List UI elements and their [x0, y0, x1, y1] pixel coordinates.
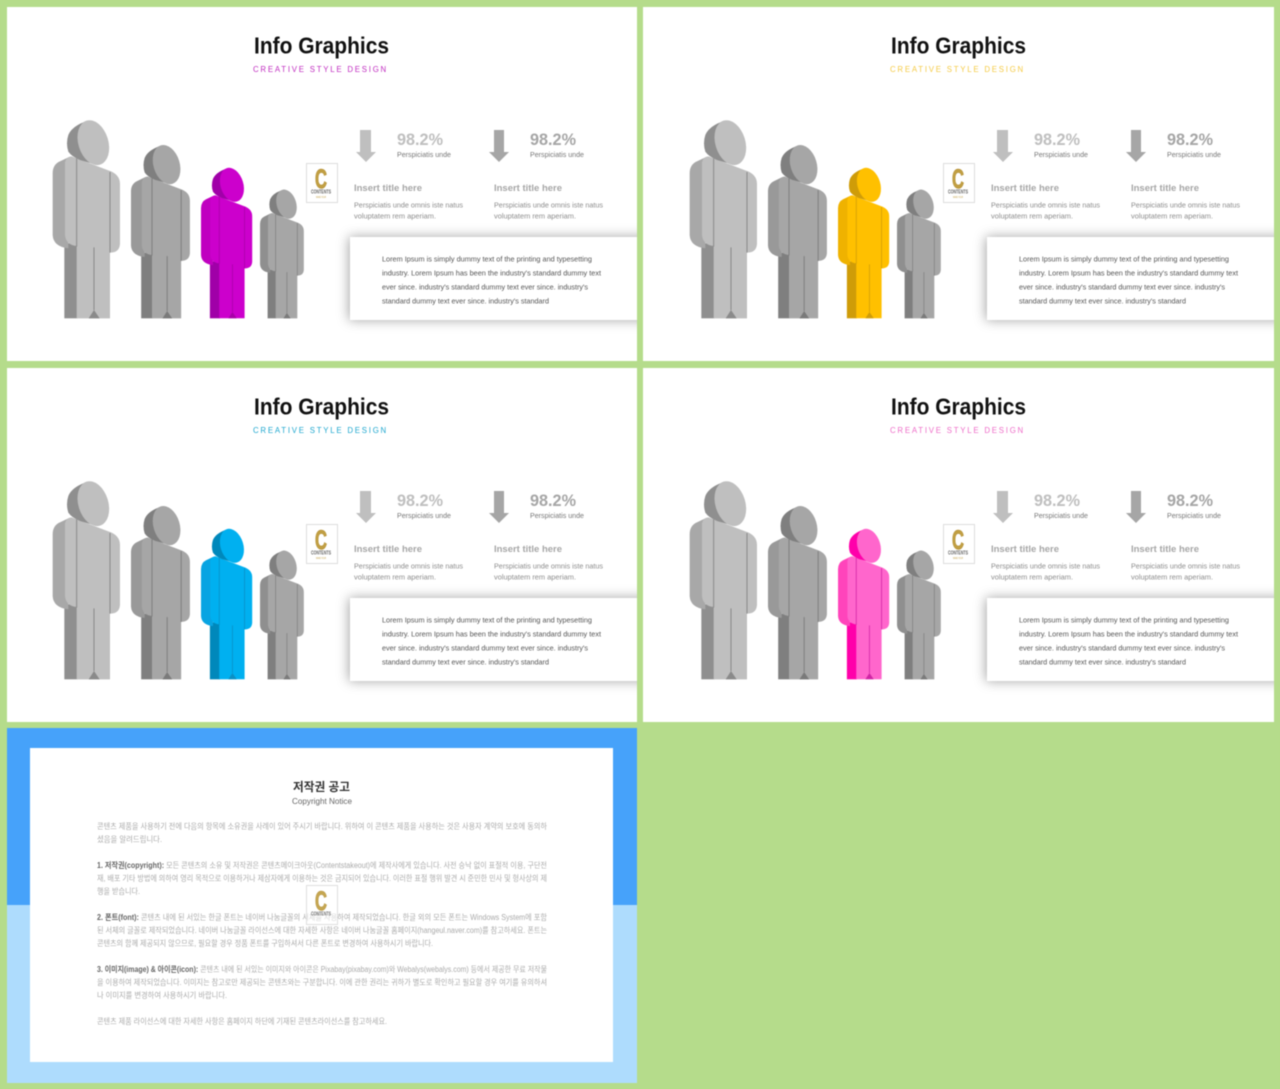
logo: [306, 164, 338, 202]
stat 2 value: 98.2%: [530, 130, 576, 149]
intro paragraph: [97, 821, 548, 844]
logo watermark: CONTENTS: [311, 912, 331, 918]
subtitle: CREATIVE STYLE DESIGN: [253, 426, 388, 435]
column 1 text: Perspiciatis unde omnis iste natus: [991, 200, 1100, 210]
column 2 text: Perspiciatis unde omnis iste natus: [494, 200, 603, 210]
section 3 image and icon: 3. 이미지(image) & 아이콘(icon): 콘텐츠 내에 된 서있는 이미지와 아이콘은 Pixabay(pixabay.com)와 Webalys(webalys.com) 등에서 제공한 무료 저작물: [97, 964, 547, 974]
column 2 text: Insert title here: [494, 544, 562, 555]
text box: [987, 237, 1280, 320]
text box: Lorem Ipsum is simply dummy text of the printing and typesetting: [1019, 254, 1229, 264]
stat 1 label: Perspiciatis unde: [397, 150, 451, 159]
logo watermark: [306, 886, 338, 924]
column 2 text: [1131, 183, 1240, 220]
section 2 font: 2. 폰트(font): 콘텐츠 내에 된 서있는 한글 폰트는 네이버 나눔글꼴의 서체를 사용하여 제작되었습니다. 한글 외의 모든 폰트는 Windows System에 포함: [97, 912, 548, 922]
column 2 text: [494, 183, 603, 220]
section 2 font: 된 서체의 글꼴로 제작되었습니다. 네이버 나눔글꼴 라이선스에 대한 자세한 사항은 네이버 나눔글꼴 홈페이지(hangeul.naver.com)를 참고하세요. 폰트는: [97, 925, 547, 935]
stat 1 value: 98.2%: [1034, 491, 1080, 510]
column 2 text: voluptatem rem aperiam.: [494, 572, 576, 582]
stat 2 label: Perspiciatis unde: [530, 150, 584, 159]
column 1 text: Perspiciatis unde omnis iste natus: [991, 562, 1100, 570]
stat 1 label: Perspiciatis unde: [397, 511, 451, 520]
logo: C: [952, 164, 964, 194]
arrow 1: [356, 491, 376, 523]
person 1: [53, 477, 120, 679]
text box: [350, 237, 650, 320]
arrow 2: [1126, 491, 1146, 523]
person 3 highlighted: [201, 165, 252, 318]
person 3 highlighted: [838, 165, 889, 318]
title: Info Graphics: [891, 394, 1026, 420]
section 1 copyright: 행을 받습니다.: [97, 886, 140, 896]
logo: CONTENTS: [311, 550, 331, 556]
stat 2 value: 98.2%: [530, 491, 576, 510]
people chart: [53, 477, 304, 679]
logo: MAKE YOUR: [953, 556, 963, 560]
section 3 image and icon: 을 이용하여 제작되었습니다. 이미지는 참고로만 제공되는 콘텐츠와는 구분합니다. 이에 관한 권리는 귀하가 별도로 확인하고 필요할 경우 여기를 유의하셔: [97, 977, 547, 987]
text box: industry. Lorem Ipsum has been the industry's standard dummy text: [1019, 630, 1239, 638]
column 1 text: Insert title here: [354, 183, 422, 194]
column 2 text: voluptatem rem aperiam.: [1131, 572, 1213, 582]
column 1 text: Perspiciatis unde omnis iste natus: [354, 200, 463, 210]
person 1: [690, 116, 757, 318]
text box: Lorem Ipsum is simply dummy text of the printing and typesetting: [382, 616, 592, 624]
column 1 text: voluptatem rem aperiam.: [354, 212, 436, 220]
column 2 text: Perspiciatis unde omnis iste natus: [1131, 200, 1240, 210]
person 2: [131, 503, 190, 679]
title: Info Graphics: [254, 32, 389, 58]
text box: industry. Lorem Ipsum has been the industry's standard dummy text: [382, 268, 602, 278]
panel: magenta slide: [7, 7, 650, 361]
stat 2 label: Perspiciatis unde: [1167, 150, 1221, 159]
column 2 text: [1131, 544, 1240, 582]
section 1 copyright: 1. 저작권(copyright): 모든 콘텐츠의 소유 및 저작권은 콘텐츠메이크아웃(Contentstakeout)에 제작사에게 있습니다. 사전 승낙 없이 표절적 이용, 구단전: [97, 860, 547, 870]
column 1 text: [354, 544, 463, 582]
stat 2 value: 98.2%: [1167, 130, 1213, 149]
logo: CONTENTS: [311, 190, 331, 196]
column 1 text: voluptatem rem aperiam.: [991, 572, 1073, 582]
text box: ever since. industry's standard dummy text ever since. industry's: [382, 644, 588, 652]
person 2: [768, 503, 827, 679]
section 1 copyright: 재, 배포 기타 방법에 의하여 영리 목적으로 이용하거나 제삼자에게 이용하는 것은 금지되어 있습니다. 이러한 표절 행위 발견 시 준민한 민사 및 형사상의 제: [97, 873, 547, 883]
column 1 text: Insert title here: [354, 544, 422, 555]
text box: industry. Lorem Ipsum has been the industry's standard dummy text: [1019, 268, 1239, 278]
text box: standard dummy text ever since. industry's standard: [382, 658, 549, 666]
title: Info Graphics: [254, 394, 389, 420]
text box: industry. Lorem Ipsum has been the industry's standard dummy text: [382, 630, 602, 638]
logo: [306, 524, 338, 564]
logo: [944, 524, 974, 564]
logo: C: [315, 164, 327, 194]
subtitle: CREATIVE STYLE DESIGN: [253, 65, 388, 74]
person 1: [53, 116, 120, 318]
logo: MAKE YOUR: [953, 195, 963, 199]
text box: ever since. industry's standard dummy text ever since. industry's: [1019, 282, 1225, 292]
logo: MAKE YOUR: [316, 195, 326, 199]
arrow 2: [489, 491, 509, 523]
column 1 text: Perspiciatis unde omnis iste natus: [354, 562, 463, 570]
column 2 text: Insert title here: [1131, 183, 1199, 194]
logo: C: [315, 525, 327, 555]
panel: copyright notice: [7, 728, 637, 1083]
column 1 text: voluptatem rem aperiam.: [354, 572, 436, 582]
column 2 text: [494, 544, 603, 582]
stat 1 label: Perspiciatis unde: [1034, 150, 1088, 159]
text box: [987, 598, 1280, 681]
column 1 text: [354, 183, 463, 220]
text box: standard dummy text ever since. industry's standard: [382, 296, 549, 306]
stat 1 value: 98.2%: [1034, 130, 1080, 149]
text box: [350, 598, 650, 681]
column 2 text: Perspiciatis unde omnis iste natus: [1131, 562, 1240, 570]
person 4: [897, 187, 941, 318]
column 1 text: [991, 544, 1100, 582]
text box: ever since. industry's standard dummy text ever since. industry's: [1019, 644, 1225, 652]
section 2 font: [97, 912, 548, 948]
text box: Lorem Ipsum is simply dummy text of the printing and typesetting: [1019, 616, 1229, 624]
stat 2 label: Perspiciatis unde: [530, 511, 584, 520]
text box: standard dummy text ever since. industry's standard: [1019, 658, 1186, 666]
people chart: [53, 116, 304, 318]
stat 2 value: 98.2%: [1167, 491, 1213, 510]
section 1 copyright: [97, 860, 547, 896]
arrow 1: [356, 130, 376, 162]
subtitle: CREATIVE STYLE DESIGN: [890, 426, 1025, 435]
panel: pink slide: [643, 368, 1280, 722]
column 1 text: voluptatem rem aperiam.: [991, 212, 1073, 220]
arrow 2: [1126, 130, 1146, 162]
stat 1 value: 98.2%: [397, 491, 443, 510]
section 3 image and icon: 나 이미지를 변경하여 사용하시기 바랍니다.: [97, 990, 227, 1000]
title: Info Graphics: [891, 32, 1026, 58]
arrow 1: [993, 130, 1013, 162]
stat 1 label: Perspiciatis unde: [1034, 511, 1088, 520]
logo watermark: C: [315, 886, 327, 916]
intro paragraph: 콘텐츠 제품을 사용하기 전에 다음의 항목에 소유권을 사례이 있어 주시기 바랍니다. 위하여 이 콘텐츠 제품을 사용하는 것은 사용자 계약의 보호에 동의하: [97, 821, 548, 831]
person 2: [768, 142, 827, 318]
logo: [944, 164, 974, 202]
subtitle: CREATIVE STYLE DESIGN: [890, 65, 1025, 74]
arrow 1: [993, 491, 1013, 523]
column 2 text: Insert title here: [1131, 544, 1199, 555]
text box: Lorem Ipsum is simply dummy text of the printing and typesetting: [382, 254, 592, 264]
column 1 text: Insert title here: [991, 544, 1059, 555]
text box: ever since. industry's standard dummy text ever since. industry's: [382, 282, 588, 292]
column 2 text: Perspiciatis unde omnis iste natus: [494, 562, 603, 570]
logo: CONTENTS: [948, 190, 968, 196]
panel: yellow slide: [643, 7, 1280, 361]
person 4: [897, 548, 941, 679]
logo: C: [952, 525, 964, 555]
notice subheading: Copyright Notice: [292, 796, 352, 806]
logo: CONTENTS: [948, 550, 968, 556]
license note: 콘텐츠 제품 라이선스에 대한 자세한 사항은 홈페이지 하단에 기재된 콘텐츠라이선스를 참고하세요.: [97, 1016, 387, 1026]
column 2 text: voluptatem rem aperiam.: [494, 212, 576, 220]
person 2: [131, 142, 190, 318]
column 1 text: [991, 183, 1100, 220]
person 1: [690, 477, 757, 679]
intro paragraph: 셨음을 알려드립니다.: [97, 834, 162, 844]
people chart: [690, 477, 941, 679]
logo: MAKE YOUR: [316, 556, 326, 560]
panel: blue slide: [7, 368, 650, 722]
stat 2 label: Perspiciatis unde: [1167, 511, 1221, 520]
person 4: [260, 548, 304, 679]
column 1 text: Insert title here: [991, 183, 1059, 194]
column 2 text: voluptatem rem aperiam.: [1131, 212, 1213, 220]
people chart: [690, 116, 941, 318]
person 4: [260, 187, 304, 318]
person 3 highlighted: [201, 526, 252, 679]
person 3 highlighted: [838, 526, 889, 679]
section 2 font: 콘텐츠의 함께 제공되지 않으므로, 필요할 경우 정품 폰트를 구입하셔서 다른 폰트로 변경하여 사용하시기 바랍니다.: [97, 938, 433, 948]
section 3 image and icon: [97, 964, 547, 1000]
column 2 text: Insert title here: [494, 183, 562, 194]
notice heading: 저작권 공고: [293, 779, 350, 794]
stat 1 value: 98.2%: [397, 130, 443, 149]
text box: standard dummy text ever since. industry's standard: [1019, 296, 1186, 306]
arrow 2: [489, 130, 509, 162]
